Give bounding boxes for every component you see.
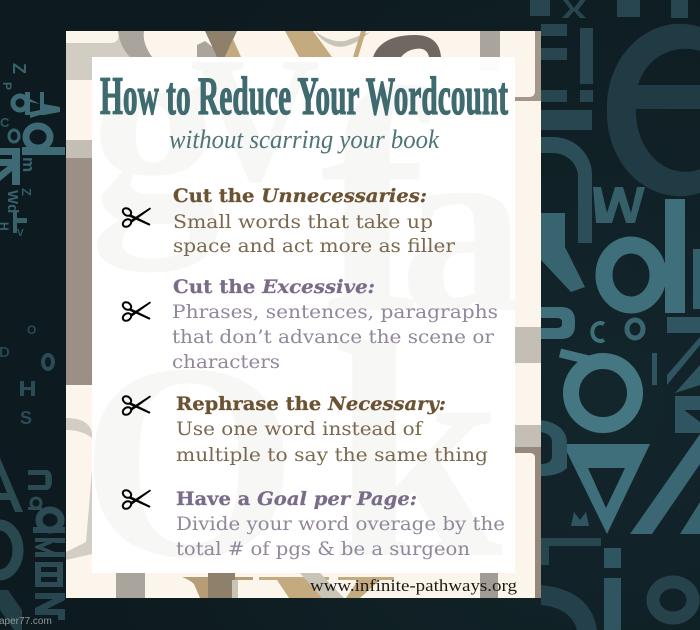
- body text: [176, 513, 505, 560]
- background letters: left side: m: [19, 157, 38, 172]
- heading: Have a Goal per Page:: [176, 489, 417, 510]
- icon: scissors: [121, 301, 151, 322]
- item: goal per page: [121, 489, 505, 560]
- background letters: left side: Z: [19, 188, 34, 196]
- background letters: left side: C: [0, 115, 10, 130]
- body text: multiple to say the same thing: [176, 444, 488, 466]
- body text: that don’t advance the scene or: [172, 326, 495, 348]
- body text: characters: [172, 351, 280, 373]
- body text: space and act more as filler: [173, 235, 456, 257]
- watermark: aper77.com: [0, 616, 52, 627]
- body text: [173, 211, 456, 257]
- icon: scissors: [121, 207, 151, 228]
- faint letterforms inside panel: [94, 62, 515, 558]
- item: cut the excessive: [121, 277, 498, 373]
- faint letterforms inside panel: O: [80, 305, 298, 616]
- background letters: left side: [0, 63, 65, 630]
- heading: Cut the Unnecessaries:: [173, 186, 427, 207]
- body text: [172, 301, 498, 373]
- faint letterforms inside panel: f: [320, 26, 430, 380]
- heading: Rephrase the Necessary:: [176, 394, 446, 415]
- translucent white panel: [92, 57, 515, 573]
- faint letterforms inside panel: V: [190, 20, 320, 219]
- background letters: left side: Wd: [4, 190, 21, 213]
- background letters: left side: Z: [9, 63, 29, 74]
- icon: scissors: [121, 489, 151, 510]
- background letters: left side: S: [20, 408, 32, 428]
- faint letterforms inside panel: a: [400, 88, 525, 365]
- background letters: left side: P: [0, 82, 14, 90]
- body text: Divide your word overage by the: [176, 513, 505, 535]
- background letters: right side: [530, 0, 700, 630]
- body text: total # of pgs & be a surgeon: [176, 538, 470, 560]
- heading: Cut the Excessive:: [173, 277, 375, 298]
- icon: scissors: [121, 395, 151, 416]
- faint letterforms inside panel: k: [330, 280, 504, 623]
- body text: Phrases, sentences, paragraphs: [172, 301, 498, 323]
- body text: Use one word instead of: [176, 418, 424, 440]
- body text: Small words that take up: [173, 211, 433, 233]
- background letters: left side: V: [17, 228, 24, 239]
- website url: www.infinite-pathways.org: [310, 576, 518, 595]
- item: cut the unnecessaries: [121, 186, 456, 257]
- item: rephrase the necessary: [121, 394, 488, 466]
- card letterforms: [66, 31, 541, 598]
- body text: [176, 418, 488, 466]
- background letters: left side: O: [27, 323, 36, 337]
- subtitle: without scarring your book: [169, 125, 439, 154]
- panel: cream card: [66, 0, 541, 623]
